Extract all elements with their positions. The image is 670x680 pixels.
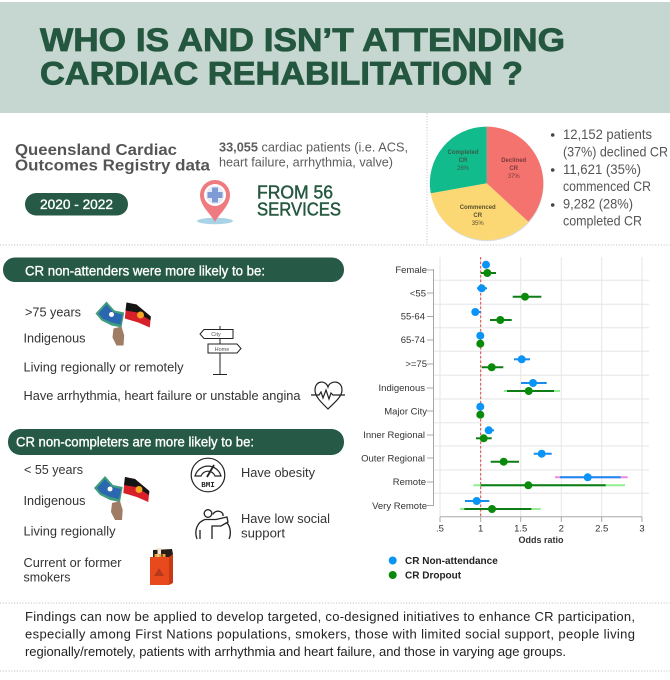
heading: non-attenders	[3, 258, 344, 282]
y-axis labels: Remote	[393, 477, 426, 488]
findings paragraph: especially among First Nations populations, smokers, those with limited social support, people living	[25, 626, 635, 642]
legend	[389, 556, 498, 582]
heading: non-completers	[8, 429, 344, 455]
findings paragraph	[25, 609, 635, 659]
list: non-attender traits: >75 years	[25, 304, 81, 320]
pie chart	[430, 127, 544, 241]
icon: cigarette pack	[150, 548, 173, 585]
pie label: commenced: CR	[473, 213, 483, 219]
y-axis labels: Indigenous	[379, 383, 425, 394]
non-attendance points	[471, 261, 592, 505]
pie summary bullets	[551, 126, 668, 228]
social support label: Have low social	[241, 511, 330, 526]
dropout points	[476, 269, 533, 513]
dropout intervals	[460, 273, 625, 509]
icon: signpost: Home	[215, 347, 229, 353]
title	[40, 22, 565, 92]
forest plot: odds ratios	[361, 257, 649, 582]
pie summary bullets: commenced CR	[563, 178, 651, 194]
y-axis labels: Female	[395, 265, 427, 276]
pie label: completed: Completed	[447, 150, 479, 156]
icon: flags held in hand	[96, 302, 151, 346]
patient count text	[219, 140, 408, 170]
patient count text: heart failure, arrhythmia, valve)	[219, 154, 393, 170]
x-axis labels: .5	[436, 524, 444, 534]
icon: heart with pulse	[311, 382, 345, 409]
social support label: support	[241, 526, 285, 540]
title: CARDIAC REHABILITATION ?	[40, 56, 523, 92]
list: non-attender traits: Living regionally or remotely	[24, 360, 184, 374]
pie label: commenced: Commenced	[460, 205, 496, 211]
pie label: declined: Declined	[501, 158, 527, 164]
icon: signpost: City	[211, 332, 221, 338]
heading: non-attenders: CR non-attenders were more likely to be:	[25, 264, 265, 278]
registry heading: Queensland Cardiac	[15, 142, 177, 159]
pie summary bullets: 12,152 patients	[563, 126, 652, 142]
pie label: completed: 28%	[457, 166, 470, 172]
findings paragraph: regionally/remotely, patients with arrhythmia and heart failure, and those in varying age groups.	[25, 644, 566, 659]
pie label: commenced: 35%	[472, 221, 484, 227]
icon: supporting people	[196, 510, 230, 539]
chart axes	[427, 269, 642, 522]
pie summary bullets: completed CR	[563, 212, 642, 228]
panel: non-attenders	[3, 258, 345, 409]
findings paragraph: Findings can now be applied to develop targeted, co-designed initiatives to enhance CR participation,	[25, 609, 635, 624]
heading: non-completers: CR non-completers are more likely to be:	[16, 434, 254, 450]
x-axis labels: 2.5	[595, 524, 608, 534]
header banner	[0, 2, 670, 113]
y-axis labels: <55	[410, 288, 426, 300]
x-axis labels: 1.5	[514, 524, 527, 534]
y-axis labels: Very Remote	[372, 501, 427, 512]
list: non-completer traits: Living regionally	[24, 524, 116, 538]
pie summary bullets: 11,621 (35%)	[563, 161, 641, 177]
non-attendance intervals	[465, 288, 628, 501]
obesity label: Have obesity	[241, 465, 315, 480]
icon: flags held in hand	[94, 476, 149, 520]
y-axis labels: 55-64	[401, 312, 425, 322]
pie label: commenced	[460, 205, 496, 227]
x-axis labels: Odds ratio	[518, 535, 564, 545]
pie label: declined	[501, 158, 527, 180]
legend: CR Non-attendance	[405, 556, 498, 567]
date pill: 2020 - 2022	[40, 197, 113, 212]
x-axis labels: 3	[639, 524, 645, 534]
icon: signpost	[200, 326, 241, 374]
list: non-completer traits: Current or former	[24, 555, 122, 570]
x-axis labels	[436, 524, 645, 545]
title: WHO IS AND ISN’T ATTENDING	[40, 22, 565, 58]
y-axis labels: Inner Regional	[363, 430, 425, 441]
x-axis labels: 1	[478, 524, 483, 534]
list: non-completer traits: smokers	[24, 570, 71, 584]
list: non-completer traits	[24, 462, 122, 584]
list: non-attender traits: Indigenous	[24, 330, 86, 346]
icon: location pin with cross	[197, 180, 233, 224]
pie label: declined: 37%	[508, 174, 520, 180]
y-axis labels: Major City	[384, 406, 427, 418]
patient count text: 33,055 cardiac patients (i.e. ACS,	[219, 140, 408, 154]
social support label	[241, 511, 330, 540]
y-axis labels	[361, 265, 427, 512]
pie label: completed: CR	[459, 158, 468, 164]
panel: non-completers	[8, 429, 344, 585]
list: non-completer traits: Indigenous	[24, 493, 86, 508]
y-axis labels: 65-74	[401, 335, 425, 346]
x-axis labels: 2	[559, 524, 564, 534]
services count: SERVICES	[257, 200, 341, 220]
registry heading	[15, 142, 210, 174]
pie label: declined: CR	[509, 166, 519, 172]
icon: BMI gauge: BMI	[201, 482, 215, 490]
icon: BMI gauge	[191, 458, 225, 492]
services count	[257, 182, 341, 220]
services count: FROM 56	[257, 182, 333, 202]
pie label: completed	[447, 150, 479, 172]
legend: CR Dropout	[405, 570, 462, 582]
list: non-completer traits: < 55 years	[24, 462, 83, 477]
registry heading: Outcomes Registry data	[15, 158, 210, 174]
y-axis labels: Outer Regional	[361, 454, 425, 464]
y-axis labels: >=75	[405, 359, 427, 370]
date pill	[25, 193, 128, 216]
pie summary bullets: 9,282 (28%)	[563, 196, 633, 212]
list: non-attender traits: Have arrhythmia, heart failure or unstable angina	[24, 388, 301, 403]
list: non-attender traits	[24, 304, 301, 403]
